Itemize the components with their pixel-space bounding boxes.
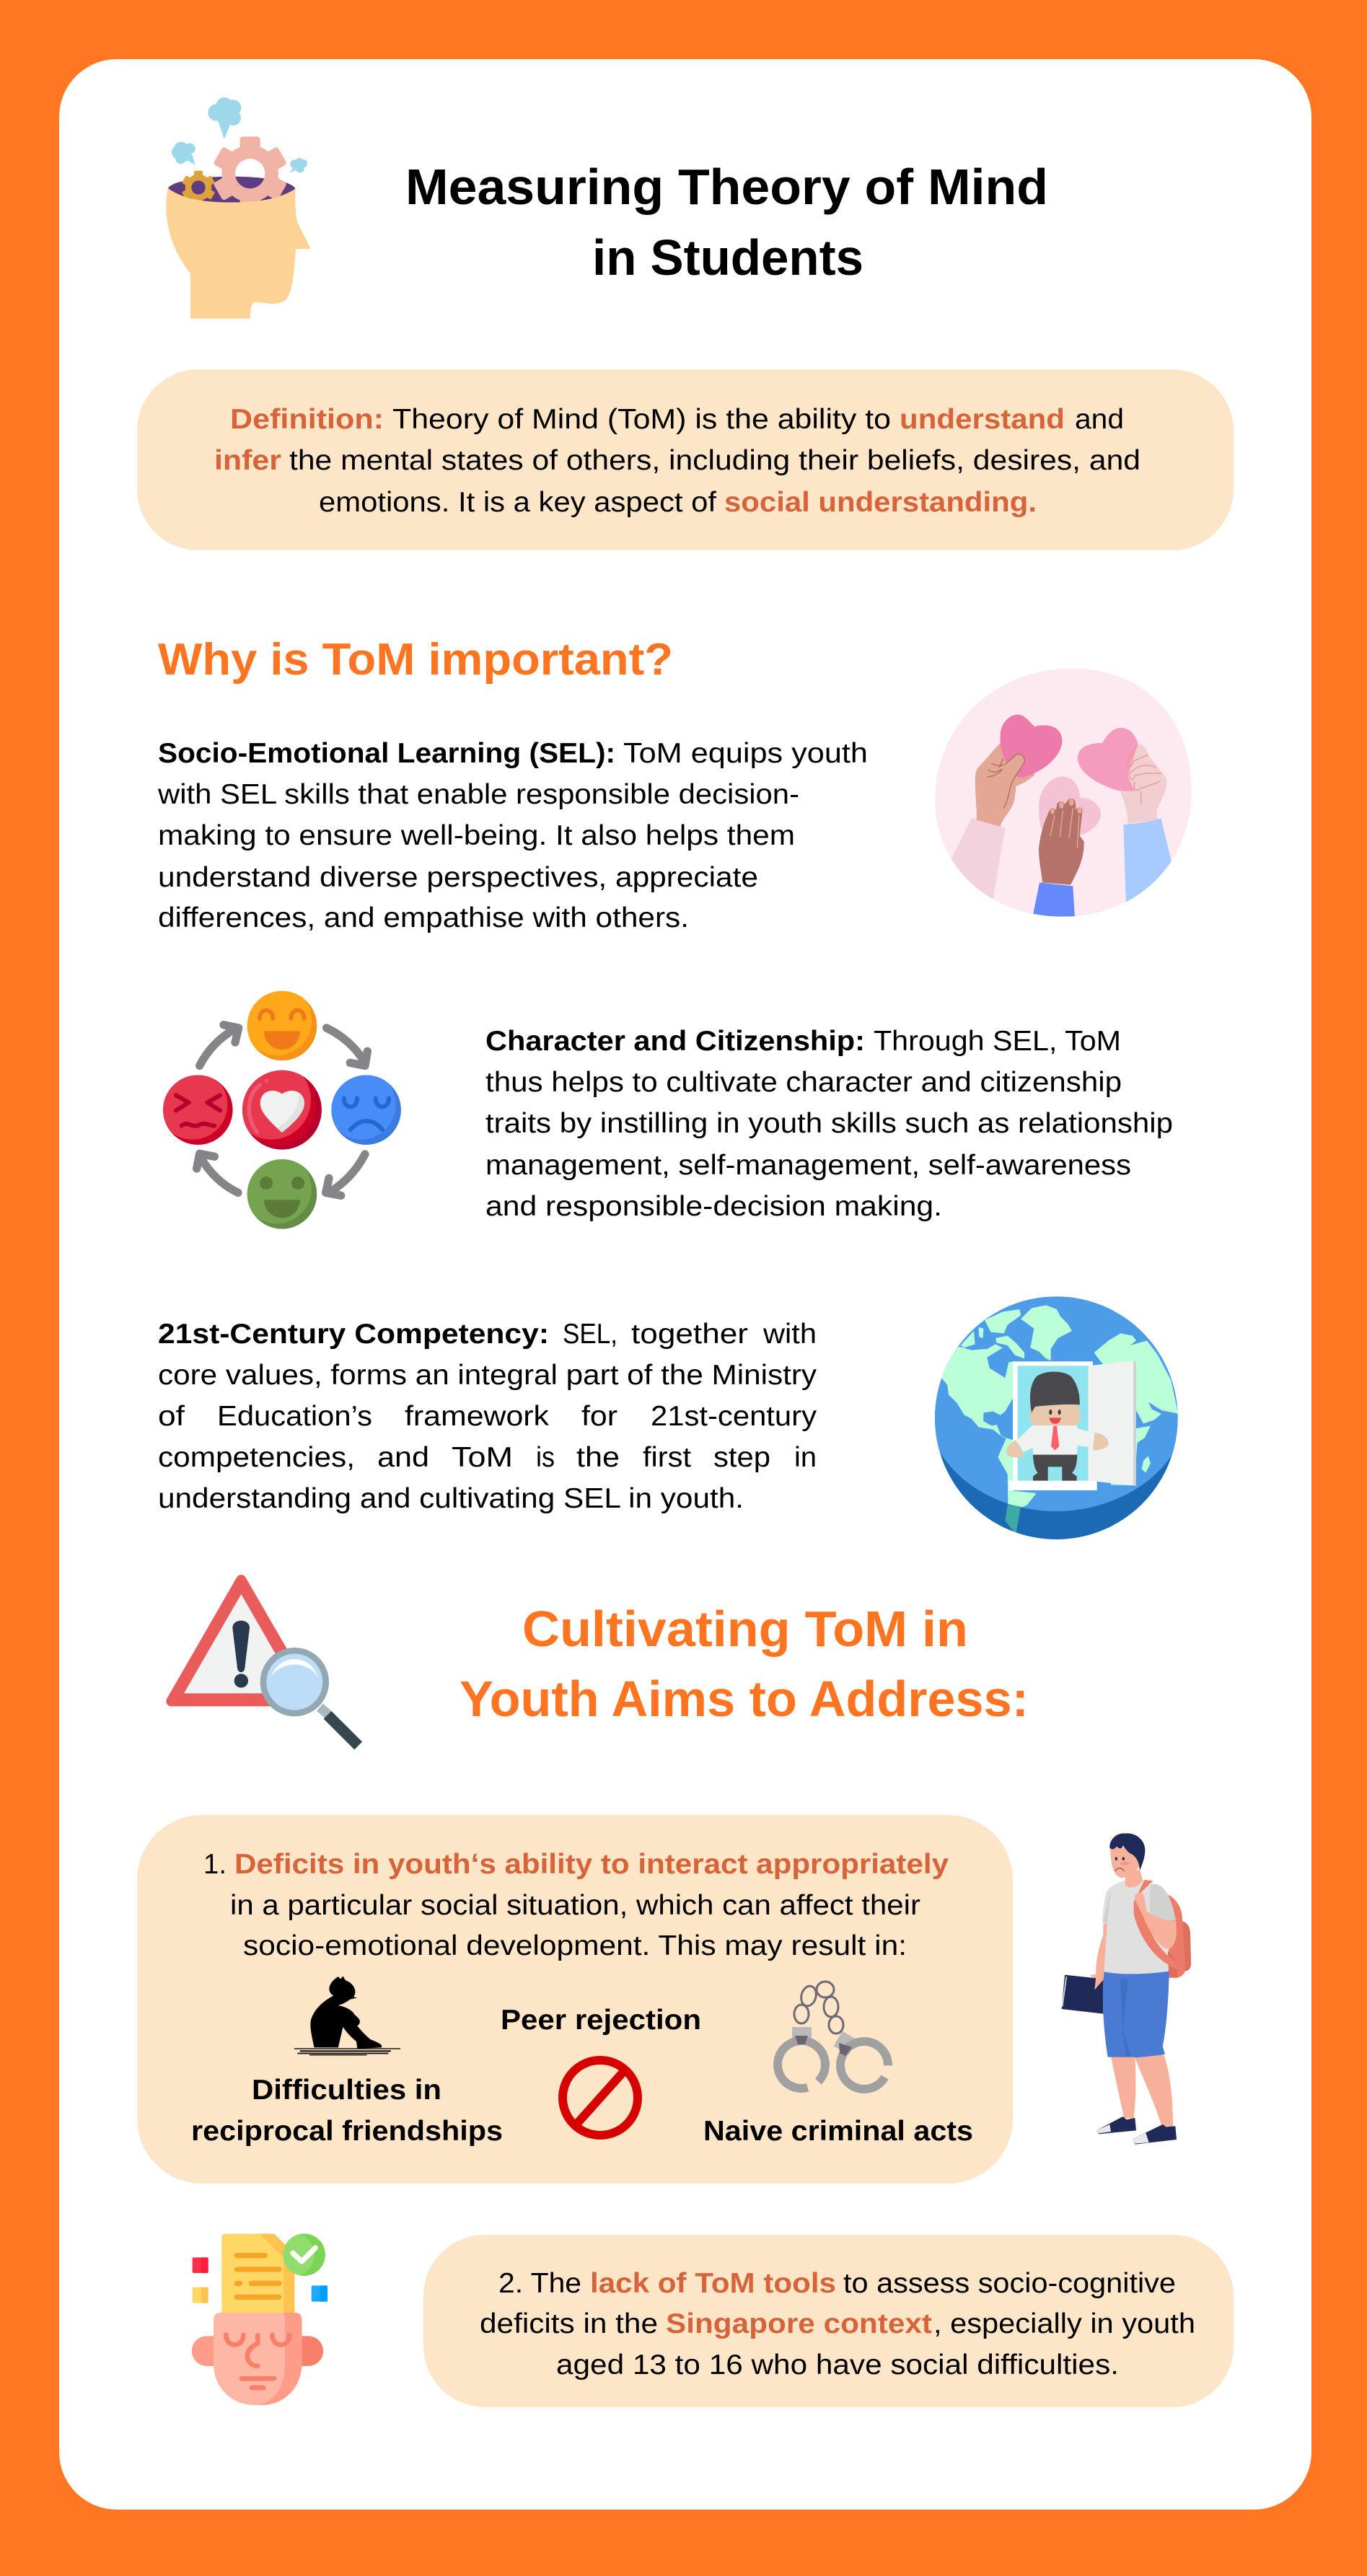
text block: character and citizenship xyxy=(485,1026,1173,1222)
text block: socio-emotional learning: with SEL skills that enable responsible decision- xyxy=(157,779,799,810)
heading: cultivating ToM: Youth Aims to Address: xyxy=(460,1671,1029,1727)
panel: definition: Definition: xyxy=(230,404,384,435)
text block: 21st-century competency: and xyxy=(377,1442,429,1473)
text block: 21st-century competency: core values, forms an integral part of the Ministry xyxy=(158,1360,817,1391)
text block: socio-emotional learning: Socio-Emotional Learning (SEL): xyxy=(158,738,615,769)
icon: emotions cycle xyxy=(158,985,401,1229)
text block: 21st-century competency xyxy=(158,1319,817,1514)
smiling green face xyxy=(247,1159,317,1229)
panel: definition: emotions. It is a key aspect of xyxy=(319,487,716,518)
text block: 21st-century competency: Education’s xyxy=(217,1401,372,1432)
text block: 21st-century competency: competencies, xyxy=(158,1442,355,1473)
panel: definition: Theory of Mind (ToM) is the ability to xyxy=(392,404,891,435)
text block: socio-emotional learning xyxy=(157,738,868,933)
panel: definition: the mental states of others, including their beliefs, desires, and xyxy=(289,445,1140,476)
label: reciprocal friendships: reciprocal friendships xyxy=(191,2116,503,2147)
text block: character and citizenship: and responsible-decision making. xyxy=(485,1191,942,1222)
text block: 21st-century competency: with xyxy=(762,1319,817,1350)
panel: lack of ToM tools: to assess socio-cognitive xyxy=(843,2268,1176,2299)
text block: 21st-century competency: for xyxy=(581,1401,617,1432)
panel: lack of ToM tools: 2. The xyxy=(498,2268,581,2299)
panel: deficits in interaction: socio-emotional development. This may result in: xyxy=(243,1930,907,1961)
panel: deficits in interaction: in a particular social situation, which can affect their xyxy=(230,1890,920,1921)
panel: lack of ToM tools: deficits in the xyxy=(480,2308,658,2339)
happy face xyxy=(247,991,317,1060)
heading: cultivating ToM: Cultivating ToM in xyxy=(522,1601,968,1657)
panel: definition: social understanding. xyxy=(724,487,1037,518)
text block: character and citizenship: thus helps to cultivate character and citizenship xyxy=(485,1067,1122,1098)
label: reciprocal friendships: Difficulties in xyxy=(252,2075,441,2106)
panel: lack of ToM tools: aged 13 to 16 who have social difficulties. xyxy=(556,2349,1119,2381)
heading: why is ToM important: Why is ToM important? xyxy=(158,635,673,685)
text block: character and citizenship: traits by instilling in youth skills such as relationship xyxy=(485,1108,1173,1139)
panel: definition xyxy=(137,369,1234,550)
text block: socio-emotional learning: understand diverse perspectives, appreciate xyxy=(158,862,758,893)
label: peer rejection: Peer rejection xyxy=(501,2005,701,2036)
panel: lack of ToM tools: Singapore context xyxy=(666,2308,932,2339)
panel: definition: infer xyxy=(214,445,281,476)
text block: socio-emotional learning: differences, and empathise with others. xyxy=(158,902,689,933)
text block: character and citizenship: management, self-management, self-awareness xyxy=(485,1150,1131,1181)
heart emblem xyxy=(242,1071,322,1150)
text block: 21st-century competency: of xyxy=(158,1401,185,1432)
label: naive criminal acts: Naive criminal acts xyxy=(703,2116,973,2147)
panel: deficits in interaction: 1. xyxy=(203,1849,227,1880)
text block: 21st-century competency: 21st-century xyxy=(651,1401,817,1432)
title: in Students xyxy=(592,229,863,286)
icon: sitting child silhouette xyxy=(294,1976,400,2055)
arrows between emotions xyxy=(197,1025,367,1195)
text block: 21st-century competency: understanding and cultivating SEL in youth. xyxy=(158,1483,744,1514)
icon: handcuffs xyxy=(773,1982,897,2098)
icon: worried student xyxy=(1062,1833,1191,2145)
text block: 21st-century competency: the xyxy=(576,1442,620,1473)
title xyxy=(405,159,1048,286)
icon: head with gears xyxy=(166,97,311,319)
text block: socio-emotional learning: making to ensure well-being. It also helps them xyxy=(158,820,795,851)
text block: 21st-century competency: ToM xyxy=(452,1442,513,1473)
text block: 21st-century competency: SEL, xyxy=(563,1319,617,1350)
text block: socio-emotional learning: ToM equips youth xyxy=(623,738,868,769)
icon: warning sign with magnifier xyxy=(171,1580,359,1746)
text block: 21st-century competency: in xyxy=(794,1442,817,1473)
title: Measuring Theory of Mind xyxy=(405,159,1048,215)
icon: prohibition sign xyxy=(563,2060,638,2135)
angry face xyxy=(163,1075,233,1145)
text block: 21st-century competency: together xyxy=(631,1319,748,1350)
text block: 21st-century competency: framework xyxy=(405,1401,550,1432)
text block: character and citizenship: Character and Citizenship: xyxy=(485,1026,865,1057)
text block: 21st-century competency: 21st-Century Competency: xyxy=(158,1319,549,1350)
text block: 21st-century competency: first xyxy=(643,1442,691,1473)
panel: deficits in interaction xyxy=(137,1815,1013,2184)
panel: definition: understand xyxy=(900,404,1065,435)
panel: lack of ToM tools: lack of ToM tools xyxy=(590,2268,836,2299)
label: reciprocal friendships xyxy=(191,2075,503,2147)
panel: lack of ToM tools xyxy=(423,2235,1234,2407)
panel: definition: and xyxy=(1075,404,1124,435)
text block: character and citizenship: Through SEL, ToM xyxy=(874,1026,1121,1057)
sad face xyxy=(331,1075,401,1145)
icon: head with document and check xyxy=(192,2233,328,2405)
heading: cultivating ToM xyxy=(460,1601,1029,1727)
text block: 21st-century competency: is xyxy=(536,1442,555,1473)
text block: 21st-century competency: step xyxy=(713,1442,770,1473)
icon: hands holding hearts xyxy=(935,669,1192,918)
panel: deficits in interaction: Deficits in youth‘s ability to interact appropriately xyxy=(234,1849,949,1880)
door and man xyxy=(1006,1360,1136,1490)
icon: globe with man in doorway xyxy=(923,1284,1197,1549)
panel: lack of ToM tools: , especially in youth xyxy=(933,2308,1195,2339)
